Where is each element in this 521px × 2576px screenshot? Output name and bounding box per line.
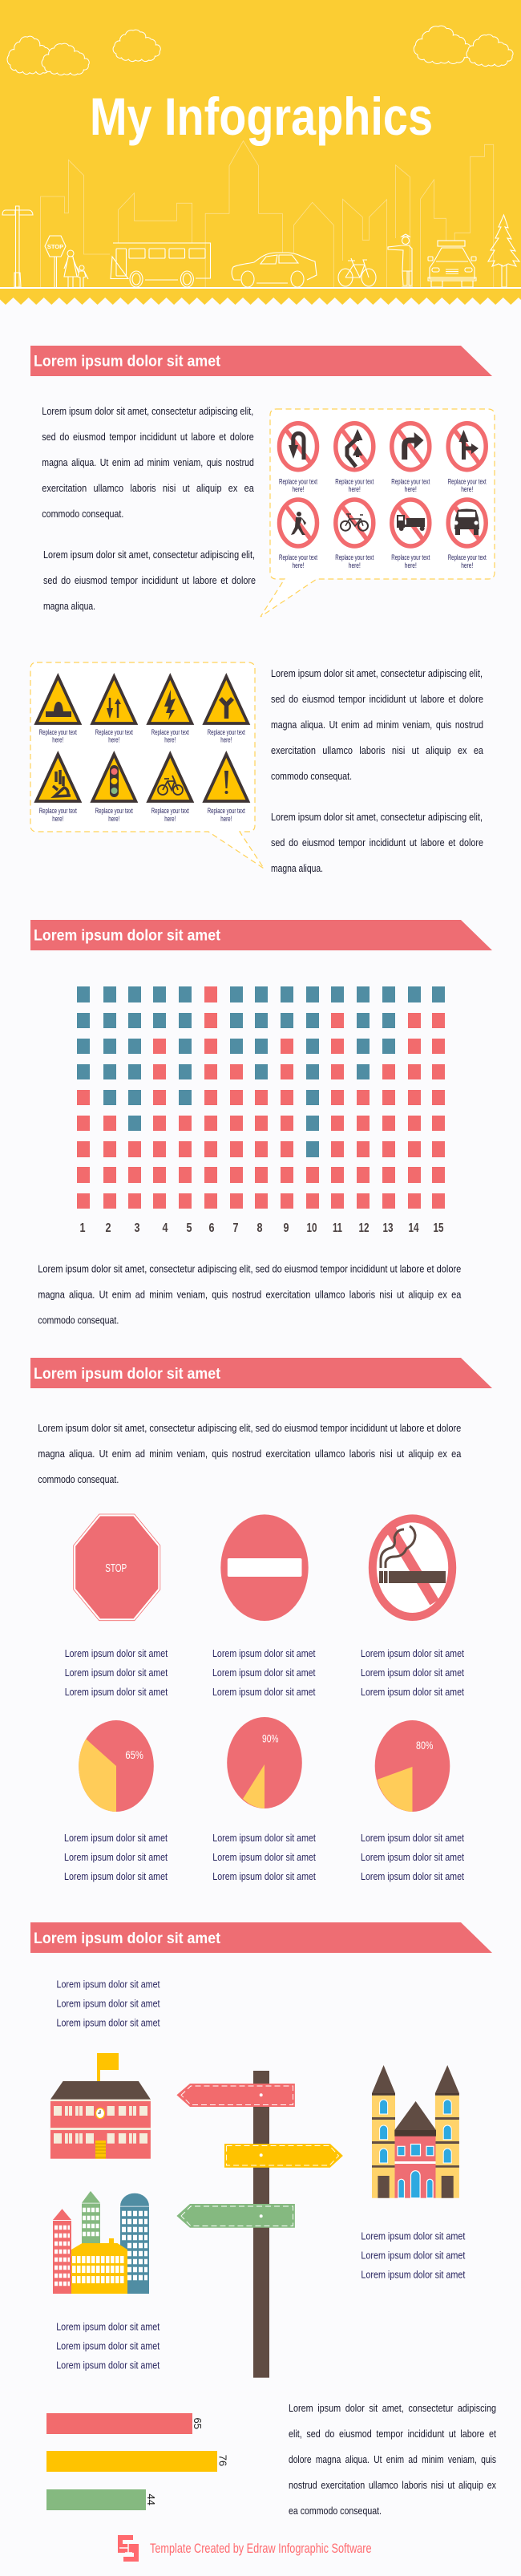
pedestrians <box>64 250 88 287</box>
arrow: red sign left <box>176 2084 295 2107</box>
text block: intro left: magna aliqua. Ut enim ad minim veniam, quis nostrud <box>42 457 254 468</box>
sign captions: here! <box>292 485 305 494</box>
text block: intro left: Lorem ipsum dolor sit amet, consectetur adipiscing elit, <box>43 549 255 561</box>
section heading 4 <box>30 1922 492 1953</box>
text block: bar chart description: ea commodo consequat. <box>289 2505 382 2517</box>
arrow: yellow sign right <box>224 2144 343 2168</box>
text block: intro right: sed do eiusmod tempor incididunt ut labore et dolore <box>271 694 483 705</box>
grid column numbers: 1 <box>80 1221 86 1235</box>
sign captions: here! <box>108 736 119 745</box>
text block: intro right: sed do eiusmod tempor incididunt ut labore et dolore <box>271 837 483 849</box>
text block: grid description <box>38 1264 461 1326</box>
text block: city caption: Lorem ipsum dolor sit amet <box>56 2322 160 2333</box>
bar chart: 76 <box>216 2455 229 2466</box>
icon: no U-turn <box>289 433 304 460</box>
icon: city towers <box>53 2191 149 2294</box>
pie chart: 65% <box>79 1720 154 1812</box>
text block: no smoking caption: Lorem ipsum dolor sit amet <box>361 1648 464 1659</box>
text block: pie 65 caption: Lorem ipsum dolor sit amet <box>64 1871 168 1882</box>
street lamp <box>2 206 33 287</box>
icon: bump <box>46 702 71 717</box>
text block: intro right: magna aliqua. <box>271 863 323 874</box>
icon: no right turn <box>405 432 423 460</box>
bus <box>111 243 210 287</box>
text block: signs description: commodo consequat. <box>38 1474 119 1485</box>
text block: pie 80 caption: Lorem ipsum dolor sit amet <box>361 1871 464 1882</box>
sign captions: Replace your text <box>151 807 189 816</box>
text block: pie 90 caption: Lorem ipsum dolor sit amet <box>212 1871 316 1882</box>
sign captions: here! <box>349 485 361 494</box>
text block: city caption <box>56 2322 160 2371</box>
text block: pie 80 caption: Lorem ipsum dolor sit amet <box>361 1852 464 1863</box>
grid column numbers: 13 <box>383 1221 394 1235</box>
icon: traffic light <box>110 765 119 797</box>
tree <box>488 215 519 287</box>
text block: pie 90 caption <box>212 1833 316 1882</box>
icon: no cars <box>454 508 479 535</box>
square grid chart <box>77 986 445 1235</box>
signpost <box>176 2071 343 2378</box>
sign captions: here! <box>405 485 417 494</box>
text block: castle caption: Lorem ipsum dolor sit amet <box>361 2250 466 2262</box>
footer credit: Template Created by Edraw Infographic Software <box>150 2541 372 2556</box>
sign captions: Replace your text <box>279 553 317 562</box>
section heading 1 <box>30 346 492 376</box>
arrow: green sign left <box>176 2204 295 2228</box>
icon: no entry <box>220 1514 309 1621</box>
tower windows <box>55 2210 147 2284</box>
stop sign <box>45 236 66 287</box>
section heading 4: Lorem ipsum dolor sit amet <box>34 1930 221 1947</box>
sign captions: Replace your text <box>208 728 245 737</box>
sign captions: here! <box>292 561 305 570</box>
text block: stop sign caption: Lorem ipsum dolor sit amet <box>65 1667 168 1679</box>
sign captions: here! <box>52 736 63 745</box>
text block: no entry caption: Lorem ipsum dolor sit amet <box>212 1667 316 1679</box>
bicycle <box>338 258 376 286</box>
text block: intro right: commodo consequat. <box>271 771 352 782</box>
sign captions: here! <box>405 561 417 570</box>
sign captions: Replace your text <box>95 728 133 737</box>
sign captions: Replace your text <box>95 807 133 816</box>
icon: no bicycles <box>341 514 368 531</box>
sign captions: Replace your text <box>279 477 317 486</box>
stop sign: STOP <box>47 243 63 250</box>
grid column numbers: 11 <box>333 1221 342 1235</box>
text block: pie 65 caption <box>64 1833 168 1882</box>
police car <box>428 241 476 287</box>
text block: stop sign caption <box>65 1648 168 1698</box>
icon: no pedestrians <box>291 512 306 535</box>
icon: no trucks <box>397 515 425 531</box>
sign captions: Replace your text <box>448 477 487 486</box>
bar chart: 65 <box>192 2417 204 2429</box>
clouds <box>7 26 513 75</box>
grid column numbers: 15 <box>433 1221 444 1235</box>
text block: intro left <box>42 406 256 612</box>
text block: intro left: Lorem ipsum dolor sit amet, consectetur adipiscing elit, <box>42 406 253 417</box>
car <box>232 253 317 287</box>
text block: stop sign caption: Lorem ipsum dolor sit amet <box>65 1687 168 1698</box>
icon: castle <box>372 2065 459 2198</box>
traffic officer <box>388 234 413 287</box>
icon: fork <box>220 699 232 719</box>
pie chart: 80%: 80% <box>416 1739 433 1752</box>
callout: prohibition signs <box>260 409 495 617</box>
sign captions: here! <box>461 485 473 494</box>
text block: intro right: Lorem ipsum dolor sit amet, consectetur adipiscing elit, <box>271 668 483 679</box>
sign captions: here! <box>108 815 119 824</box>
section heading 2 <box>30 920 492 950</box>
grid column numbers: 5 <box>186 1221 192 1235</box>
text block: intro left: magna aliqua. <box>43 601 95 612</box>
text block: pie 80 caption: Lorem ipsum dolor sit amet <box>361 1833 464 1844</box>
text block: pie 65 caption: Lorem ipsum dolor sit amet <box>64 1852 168 1863</box>
text block: school caption <box>56 1979 160 2029</box>
grid column numbers: 9 <box>284 1221 289 1235</box>
pie chart: 80% <box>375 1720 450 1812</box>
sign captions: Replace your text <box>448 553 487 562</box>
sign captions: here! <box>164 815 176 824</box>
icon: footer logo <box>118 2535 139 2562</box>
text block: pie 80 caption <box>361 1833 464 1882</box>
icon: exclamation <box>224 771 228 794</box>
sign captions <box>279 477 487 570</box>
sign captions: Replace your text <box>39 728 77 737</box>
grid column numbers: 2 <box>106 1221 111 1235</box>
section heading 3: Lorem ipsum dolor sit amet <box>34 1366 221 1383</box>
sign captions: here! <box>220 815 232 824</box>
sign captions: Replace your text <box>208 807 245 816</box>
text block: no smoking caption: Lorem ipsum dolor sit amet <box>361 1687 464 1698</box>
text block: castle caption: Lorem ipsum dolor sit amet <box>361 2231 466 2242</box>
text block: signs description: Lorem ipsum dolor sit amet, consectetur adipiscing elit, sed do eiusmod tempor incididunt ut labore et dolore <box>38 1423 461 1434</box>
section heading 3 <box>30 1358 492 1388</box>
warning triangles <box>36 677 248 801</box>
text block: school caption: Lorem ipsum dolor sit amet <box>56 1999 160 2010</box>
grid column numbers: 4 <box>162 1221 168 1235</box>
grid column numbers: 6 <box>208 1221 215 1235</box>
text block: city caption: Lorem ipsum dolor sit amet <box>56 2341 160 2352</box>
bar chart: 44 <box>145 2493 157 2505</box>
grid column numbers: 8 <box>256 1221 263 1235</box>
sign captions: here! <box>461 561 473 570</box>
text block: pie 90 caption: Lorem ipsum dolor sit amet <box>212 1852 316 1863</box>
text block: school caption: Lorem ipsum dolor sit amet <box>56 1979 160 1991</box>
text block: no smoking caption: Lorem ipsum dolor sit amet <box>361 1667 464 1679</box>
text block: intro right: Lorem ipsum dolor sit amet, consectetur adipiscing elit, <box>271 812 483 823</box>
text block: no entry caption <box>212 1648 316 1698</box>
icon: stop sign: STOP <box>105 1561 127 1575</box>
icon: cycle warning <box>158 776 183 795</box>
text block: grid description: Lorem ipsum dolor sit amet, consectetur adipiscing elit, sed do eiusmod tempor incididunt ut labore et dolore <box>38 1264 461 1275</box>
text block: intro left: sed do eiusmod tempor incididunt ut labore et dolore <box>42 431 254 443</box>
icon: two-way traffic <box>107 698 121 719</box>
text block: grid description: magna aliqua. Ut enim ad minim veniam, quis nostrud exercitation ullamco laboris nisi ut aliquip ex ea <box>38 1290 461 1301</box>
sign captions: Replace your text <box>391 477 430 486</box>
icon: stop sign <box>74 1514 160 1621</box>
sign captions: Replace your text <box>335 553 374 562</box>
sign captions: here! <box>52 815 63 824</box>
text block: stop sign caption: Lorem ipsum dolor sit amet <box>65 1648 168 1659</box>
icon: no lane change <box>347 429 362 467</box>
text block: bar chart description <box>289 2403 497 2517</box>
grid column numbers: 10 <box>306 1221 317 1235</box>
bar chart <box>46 2413 229 2510</box>
icon: falling rocks <box>53 770 71 796</box>
text block: intro right <box>271 668 483 874</box>
icon: school building <box>50 2053 151 2159</box>
sign captions: Replace your text <box>391 553 430 562</box>
grid column numbers: 12 <box>359 1221 370 1235</box>
text block: grid description: commodo consequat. <box>38 1315 119 1326</box>
text block: castle caption: Lorem ipsum dolor sit amet <box>361 2270 466 2281</box>
title: My Infographics <box>90 87 433 146</box>
skyline outlines <box>41 141 494 287</box>
pie chart: 65%: 65% <box>125 1748 143 1761</box>
text block: pie 90 caption: Lorem ipsum dolor sit amet <box>212 1833 316 1844</box>
section heading 1: Lorem ipsum dolor sit amet <box>34 353 221 371</box>
text block: no smoking caption <box>361 1648 464 1698</box>
grid column numbers: 3 <box>135 1221 140 1235</box>
ground line <box>0 287 521 289</box>
icon: no straight or right <box>458 430 479 460</box>
text block: signs description <box>38 1423 461 1485</box>
text block: intro right: magna aliqua. Ut enim ad minim veniam, quis nostrud <box>271 719 483 731</box>
sign captions: here! <box>220 736 232 745</box>
pie chart: 90% <box>227 1717 302 1808</box>
sign captions: Replace your text <box>39 807 77 816</box>
text block: intro right: exercitation ullamco laboris nisi ut aliquip ex ea <box>271 745 483 756</box>
text block: intro left: commodo consequat. <box>42 508 123 520</box>
text block: signs description: magna aliqua. Ut enim ad minim veniam, quis nostrud exercitation ullamco laboris nisi ut aliquip ex ea <box>38 1448 461 1460</box>
tower arch windows <box>380 2100 451 2163</box>
sign captions: here! <box>349 561 361 570</box>
text block: no entry caption: Lorem ipsum dolor sit amet <box>212 1687 316 1698</box>
sign captions: Replace your text <box>335 477 374 486</box>
pie chart: 90%: 90% <box>262 1732 279 1745</box>
central windows <box>398 2145 434 2198</box>
prohibition sign rings <box>279 423 486 546</box>
sign captions <box>39 728 245 824</box>
text block: school caption: Lorem ipsum dolor sit amet <box>56 2018 160 2029</box>
icon: no smoking <box>373 1518 452 1617</box>
text block: pie 65 caption: Lorem ipsum dolor sit amet <box>64 1833 168 1844</box>
text block: intro left: exercitation ullamco laboris nisi ut aliquip ex ea <box>42 483 254 494</box>
text block: no entry caption: Lorem ipsum dolor sit amet <box>212 1648 316 1659</box>
text block: castle caption <box>361 2231 466 2281</box>
sign captions: here! <box>164 736 176 745</box>
text block: intro left: sed do eiusmod tempor incididunt ut labore et dolore <box>43 575 256 586</box>
header banner <box>0 0 521 305</box>
grid column numbers: 14 <box>409 1221 419 1235</box>
grid column numbers: 7 <box>232 1221 239 1235</box>
icon: high voltage <box>164 690 176 720</box>
callout: warning signs <box>30 662 264 869</box>
text block: city caption: Lorem ipsum dolor sit amet <box>56 2360 160 2371</box>
section heading 2: Lorem ipsum dolor sit amet <box>34 927 221 945</box>
sign captions: Replace your text <box>151 728 189 737</box>
grid column numbers <box>80 1221 444 1235</box>
